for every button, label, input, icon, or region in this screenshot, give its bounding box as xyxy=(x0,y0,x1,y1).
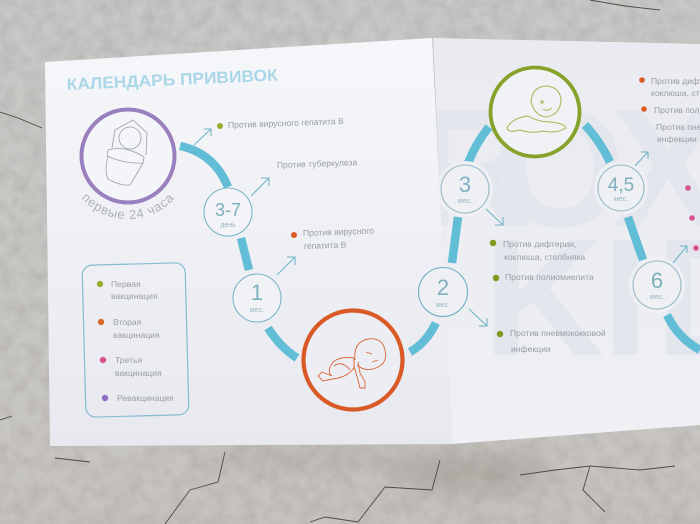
node: 2 months xyxy=(418,268,468,316)
vaccine note: pneumococcal xyxy=(497,328,606,354)
vaccine note: pneumococcal: инфекции xyxy=(511,344,551,354)
legend: first xyxy=(97,279,158,301)
legend: third: Третья xyxy=(115,355,142,365)
legend: third xyxy=(100,355,162,378)
node: 6 months xyxy=(629,257,685,313)
vaccine note: hepatitis B first dose: Против вирусного гепатита В xyxy=(228,116,344,130)
icon: sleeping baby in orange ring xyxy=(304,310,402,410)
arrows xyxy=(194,129,687,326)
vaccine notes: 4.5 months, cropped at edge: инфекции xyxy=(657,134,697,144)
icon: baby on tummy in green ring xyxy=(490,68,580,156)
legend: second: Вторая xyxy=(113,317,142,327)
node: 3 months xyxy=(437,161,493,217)
legend: first: Первая xyxy=(111,279,141,289)
vaccine note: hepatitis B second dose: Против вирусного xyxy=(303,226,374,238)
node: 3-7 days: 3-7 xyxy=(215,200,241,220)
vaccine note: hepatitis B second dose xyxy=(291,226,374,251)
vaccine note: tuberculosis: Против туберкулеза xyxy=(277,157,358,170)
legend: second: вакцинация xyxy=(113,330,160,340)
title: КАЛЕНДАРЬ ПРИВИВОК xyxy=(66,66,279,94)
panel: right leaflet page xyxy=(413,38,700,444)
legend: revaccination: Ревакцинация xyxy=(117,393,174,403)
vaccine note: diphtheria: коклюша, столбняка xyxy=(504,252,585,262)
vaccine note: hepatitis B second dose: гепатита В xyxy=(304,240,347,251)
node: 1 month xyxy=(233,274,281,322)
node: 2 months: мес. xyxy=(436,302,450,309)
node: 4.5 months: 4,5 xyxy=(608,175,634,196)
label: first 24 hours: первые 24 часа xyxy=(82,194,174,220)
timeline: teal curve segments xyxy=(180,125,700,358)
watermark: brand name xyxy=(436,118,700,355)
node: 3-7 days xyxy=(204,188,252,236)
node: 6 months: 6 xyxy=(651,268,663,293)
node: 4.5 months xyxy=(594,161,648,215)
vaccine note: diphtheria xyxy=(490,239,585,262)
node: 1 month: мес. xyxy=(250,307,264,314)
vaccine note: diphtheria: Против дифтерии, xyxy=(503,239,576,249)
icon: swaddled newborn in purple ring xyxy=(82,110,174,202)
panel: left leaflet page xyxy=(45,38,453,446)
legend: second xyxy=(98,317,160,340)
node: 3 months: 3 xyxy=(459,172,471,197)
legend: third: вакцинация xyxy=(115,368,162,378)
node: 1 month: 1 xyxy=(251,280,263,305)
node: 3-7 days: день xyxy=(220,222,236,229)
node: 6 months: мес. xyxy=(650,294,664,301)
vaccine notes: third dose dots, cropped at edge xyxy=(685,185,699,251)
vaccine note: polio: Против полиомиелита xyxy=(505,272,594,282)
node: 3 months: мес. xyxy=(458,198,472,205)
node: 2 months: 2 xyxy=(437,275,449,300)
legend box xyxy=(82,263,189,417)
vaccine notes: 4.5 months, cropped at edge xyxy=(639,76,700,144)
vaccine note: pneumococcal: Против пневмококковой xyxy=(510,328,606,338)
legend: first: вакцинация xyxy=(111,291,158,301)
node: 4.5 months: мес. xyxy=(614,196,628,203)
